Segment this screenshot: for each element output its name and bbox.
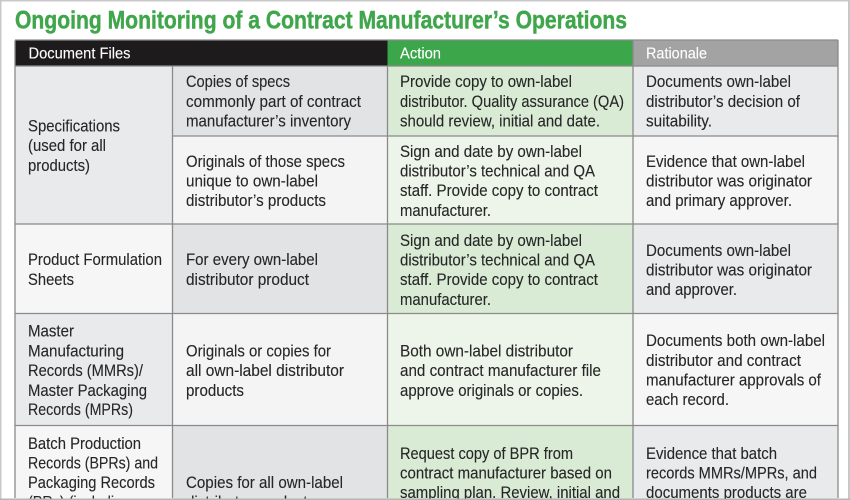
- row: specifications: Documents own-label: [646, 72, 791, 91]
- row: master manufacturing records: Records (MMRs)/: [28, 361, 143, 380]
- row: specifications: Copies of specs: [186, 72, 290, 91]
- row: specifications: manufacturer.: [400, 201, 491, 220]
- row: batch production records: Batch Production: [28, 434, 141, 453]
- header: rationale: [633, 40, 838, 66]
- row: master manufacturing records: [15, 314, 838, 426]
- row: master manufacturing records: manufacturer approvals of: [646, 370, 821, 390]
- row: product formulation sheets: Product Formulation: [28, 250, 162, 269]
- row: product formulation sheets: distributor’s technical and QA: [400, 250, 596, 270]
- row: specifications: [15, 66, 838, 224]
- row: batch production records: Evidence that batch: [646, 444, 777, 463]
- row: specifications: distributor was originator: [646, 172, 812, 190]
- row: master manufacturing records: Records (MPRs): [28, 400, 133, 419]
- row: specifications: Provide copy to own-label: [400, 72, 572, 91]
- row: specifications: distributor’s technical and QA: [400, 162, 596, 180]
- row: master manufacturing records: each record.: [646, 390, 729, 409]
- row: product formulation sheets: distributor product: [186, 270, 309, 289]
- row: product formulation sheets: distributor was originator: [646, 260, 812, 280]
- row: specifications: manufacturer’s inventory: [186, 112, 352, 130]
- row: batch production records: contract manufacturer based on: [400, 464, 612, 482]
- row: specifications: Sign and date by own-label: [400, 142, 582, 161]
- row: product formulation sheets: staff. Provide copy to contract: [400, 270, 598, 289]
- row: product formulation sheets: Sign and date by own-label: [400, 231, 582, 250]
- header: action: Action: [400, 46, 441, 62]
- row: specifications: suitability.: [646, 112, 712, 130]
- row: specifications: (used for all: [28, 136, 106, 155]
- row: master manufacturing records: Originals or copies for: [186, 342, 331, 360]
- header: document files: Document Files: [28, 46, 130, 62]
- row: master manufacturing records: all own-label distributor: [186, 361, 344, 380]
- header: action: [388, 40, 633, 66]
- row: master manufacturing records: Both own-label distributor: [400, 342, 573, 360]
- row: specifications: and primary approver.: [646, 191, 792, 210]
- row: specifications: distributor. Quality assurance (QA): [400, 92, 624, 111]
- row: master manufacturing records: Manufacturing: [28, 342, 124, 360]
- row: specifications: Evidence that own-label: [646, 152, 805, 171]
- row: master manufacturing records: products: [186, 381, 244, 400]
- row: master manufacturing records: distributor and contract: [646, 351, 801, 370]
- row: master manufacturing records: Documents both own-label: [646, 331, 825, 350]
- row: batch production records: Packaging Records: [28, 473, 155, 492]
- row: specifications: should review, initial and date.: [400, 112, 600, 130]
- row: batch production records: Request copy of BPR from: [400, 444, 573, 463]
- row: specifications: distributor’s decision of: [646, 92, 800, 111]
- row: batch production records: Copies for all own-label: [186, 473, 343, 492]
- row: product formulation sheets: Sheets: [28, 270, 74, 289]
- header: document files: [15, 40, 388, 66]
- header: rationale: Rationale: [646, 46, 707, 62]
- row: batch production records: [15, 426, 838, 500]
- title: Ongoing Monitoring of a Contract Manufacturer’s Operations: [15, 6, 627, 34]
- row: product formulation sheets: and approver.: [646, 280, 737, 299]
- row: specifications: products): [28, 156, 90, 175]
- row: specifications: Originals of those specs: [186, 152, 345, 171]
- row: product formulation sheets: For every own-label: [186, 250, 318, 269]
- row: product formulation sheets: [15, 224, 838, 314]
- row: product formulation sheets: Documents own-label: [646, 241, 791, 260]
- row: master manufacturing records: Master Packaging: [28, 381, 147, 400]
- row: specifications: staff. Provide copy to contract: [400, 181, 598, 200]
- row: batch production records: records MMRs/MPRs, and: [646, 464, 817, 482]
- row: specifications: unique to own-label: [186, 172, 318, 190]
- row: specifications: Specifications: [28, 116, 120, 136]
- row: master manufacturing records: and contract manufacturer file: [400, 361, 601, 380]
- row: master manufacturing records: approve originals or copies.: [400, 381, 583, 400]
- row: master manufacturing records: Master: [28, 322, 74, 340]
- row: specifications: commonly part of contract: [186, 92, 361, 111]
- row: product formulation sheets: manufacturer.: [400, 290, 491, 309]
- row: specifications: distributor’s products: [186, 191, 326, 210]
- row: batch production records: Records (BPRs) and: [28, 454, 158, 472]
